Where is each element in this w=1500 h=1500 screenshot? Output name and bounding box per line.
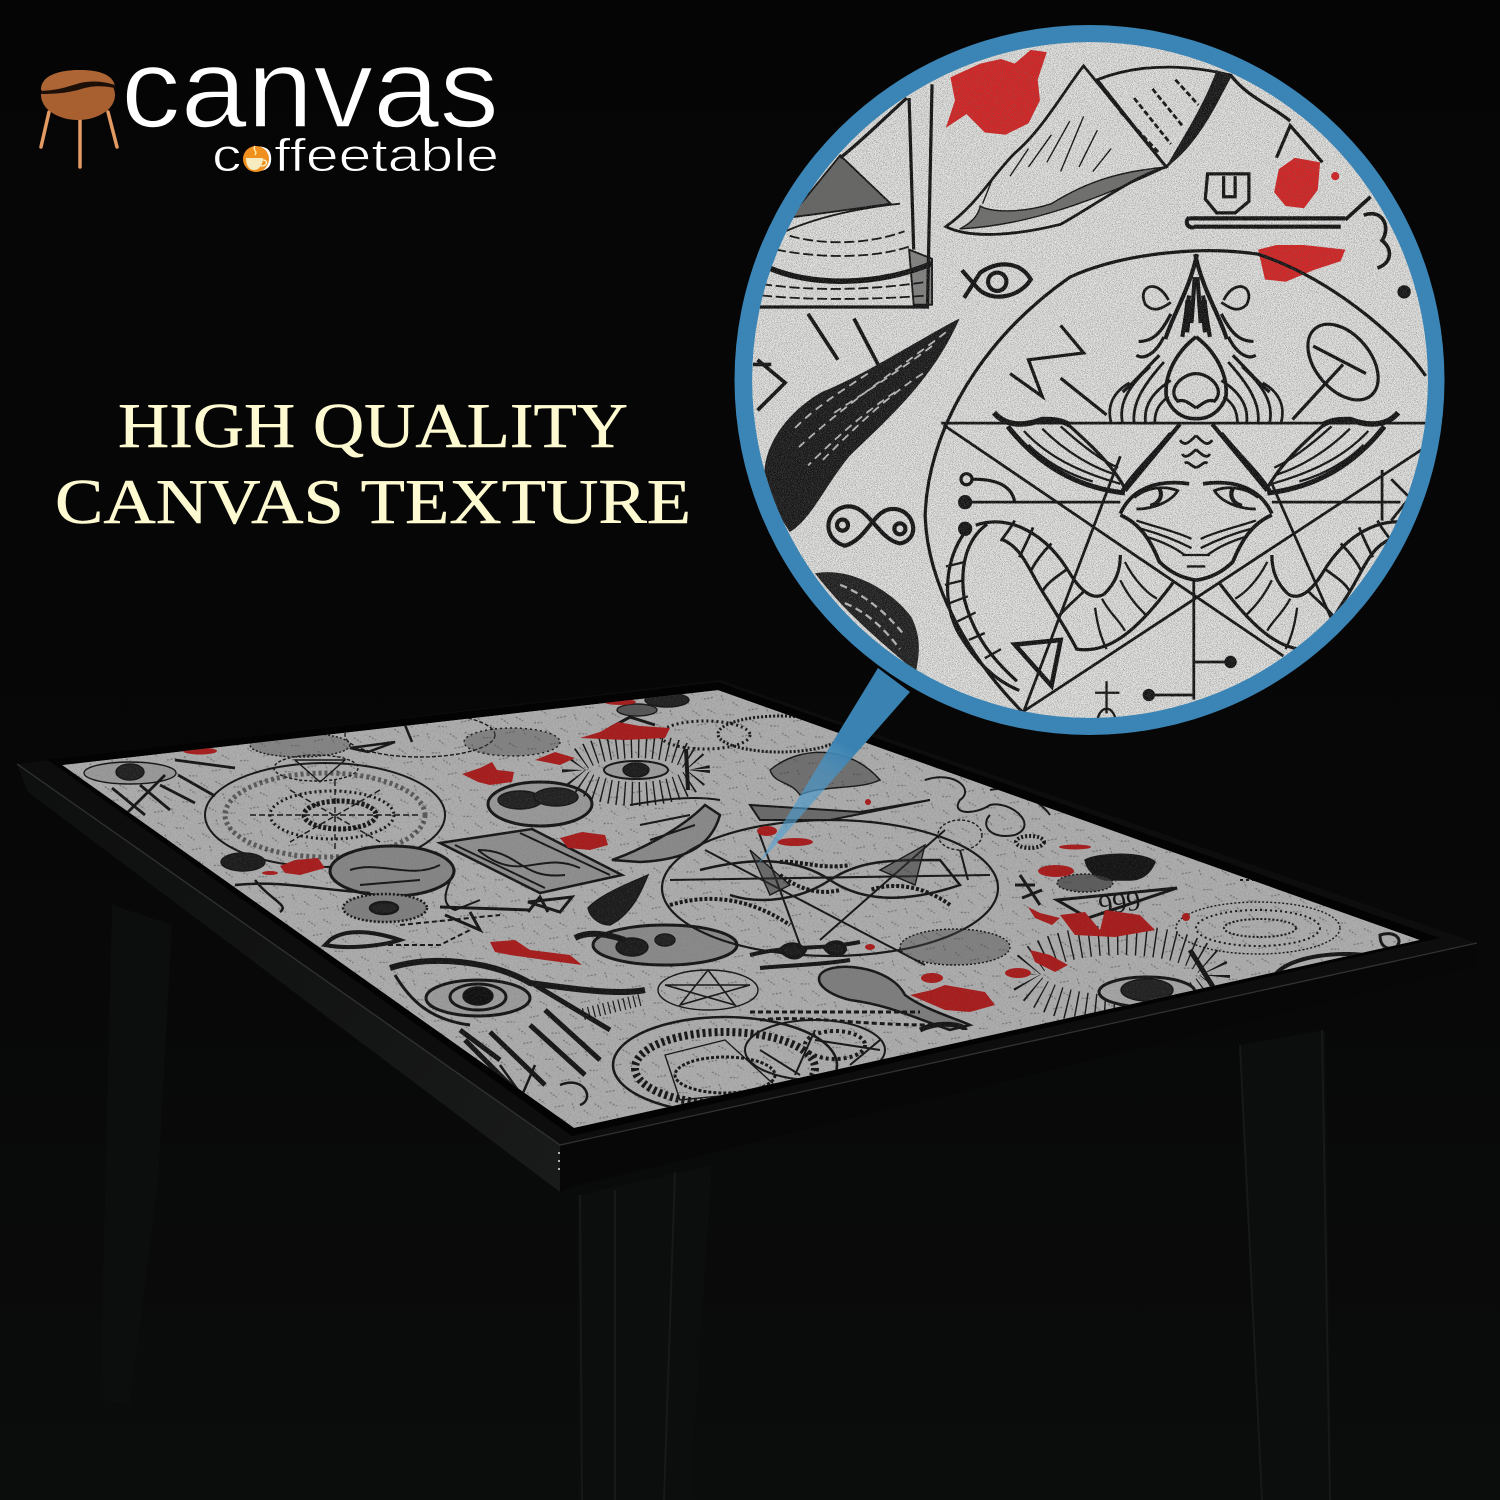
999 triangle: 999 <box>1097 885 1143 922</box>
small eye with rays <box>574 746 698 794</box>
zoomed hourglass <box>753 84 932 410</box>
upper right of centre: creature and snake <box>718 716 1050 880</box>
bottom sigil <box>613 1017 837 1113</box>
zoomed goat right half <box>1195 254 1447 690</box>
heading line 2: CANVAS TEXTURE <box>55 466 691 537</box>
sprig <box>1015 875 1042 905</box>
zoomed lower-left bird <box>815 572 919 672</box>
icon: coffee cup <box>243 146 269 172</box>
wordmark: canvas: canvas <box>121 26 499 151</box>
hourglass <box>440 829 622 893</box>
round skull <box>488 782 592 826</box>
globe <box>330 846 480 910</box>
upper stipple circles <box>250 713 495 782</box>
wordmark: coffeetable: coffeetable <box>212 129 499 181</box>
skull <box>575 925 737 965</box>
999 top and blob <box>610 693 750 749</box>
callout beam <box>757 668 910 866</box>
zoomed goat left half <box>945 254 1197 690</box>
table frame <box>17 680 1477 1192</box>
left side mini marks <box>235 880 500 947</box>
large sigil ring <box>205 763 445 867</box>
print: background marks <box>50 680 1430 1140</box>
black pot left <box>221 853 265 871</box>
big lower eye <box>390 961 645 1085</box>
lower left runes <box>500 1065 587 1105</box>
far right marks <box>1240 880 1399 975</box>
bird foot <box>588 875 648 925</box>
999 triangle <box>1057 885 1177 922</box>
earth ring right <box>1176 902 1340 954</box>
zoomed feather wing <box>764 318 960 532</box>
print: engraved motifs <box>84 693 1399 1113</box>
magnifier circle <box>730 20 1450 740</box>
black pot and round right <box>1057 854 1155 892</box>
magnifier ring <box>734 25 1444 735</box>
heading line 1: HIGH QUALITY <box>118 390 628 461</box>
eye top left <box>84 760 235 815</box>
print: red splatters <box>183 699 1190 1012</box>
eye rune under circle <box>750 942 860 968</box>
logo <box>41 26 499 181</box>
lower sigil centre <box>745 1020 885 1080</box>
zoomed axe shape <box>946 66 1322 234</box>
icon: coffee bean table <box>41 70 117 167</box>
canvas weave grain <box>730 20 1450 740</box>
pentagram circle small <box>658 970 758 1010</box>
foliage and rune triangle <box>440 897 572 930</box>
zoomed eye glyph <box>962 264 1031 298</box>
zoomed canvas detail <box>752 42 1428 718</box>
right eye with rays <box>1025 940 1215 1010</box>
heading <box>55 390 691 537</box>
zoomed knot glyph <box>828 506 913 546</box>
stipple block <box>464 728 560 756</box>
canvas grain <box>50 680 1430 1140</box>
central large pentagram circle <box>662 820 998 965</box>
heart shape <box>612 798 720 862</box>
table top: printed canvas <box>50 680 1430 1140</box>
lightbulb shape <box>819 967 970 1030</box>
zoomed red splatters <box>946 50 1345 282</box>
table legs <box>100 905 1332 1500</box>
runes right of sigil <box>750 1012 930 1025</box>
stipple block right <box>900 929 1010 965</box>
zoomed key <box>1187 174 1409 296</box>
zoomed sigil circle and pentagram <box>925 251 1426 736</box>
